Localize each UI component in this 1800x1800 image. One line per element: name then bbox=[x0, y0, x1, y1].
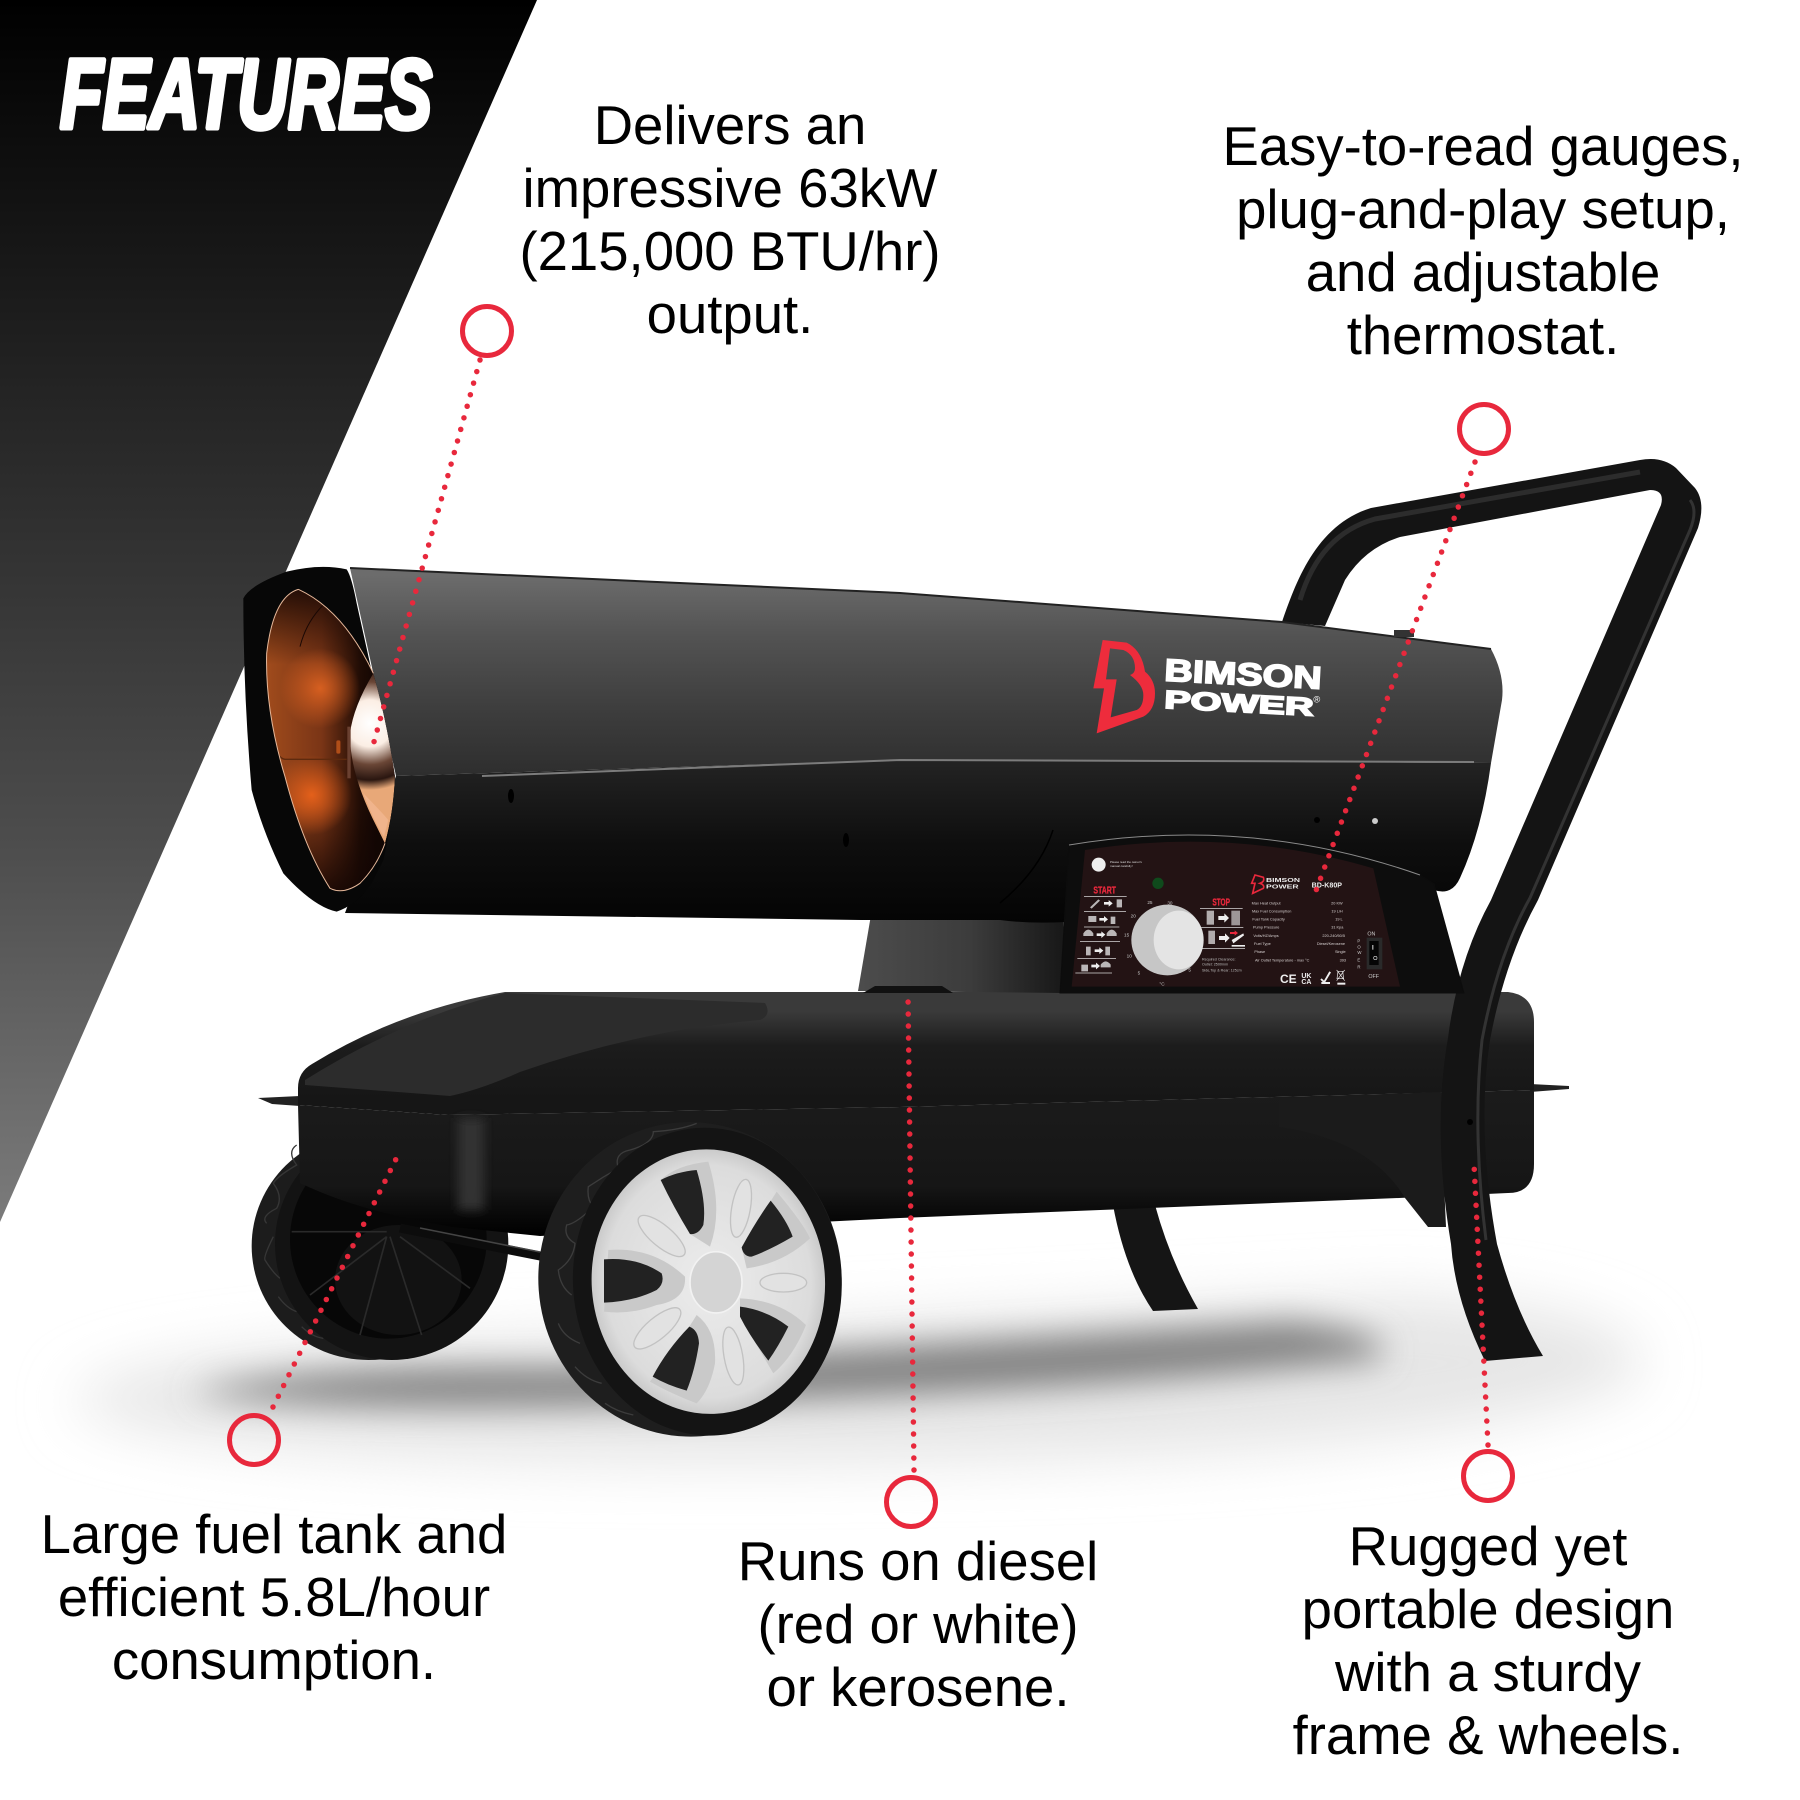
callout: output bbox=[372, 95, 941, 749]
wheel ovals bbox=[628, 1178, 807, 1387]
heater product bbox=[243, 459, 1701, 1447]
brand logo bbox=[1093, 640, 1323, 733]
registered mark: ® bbox=[1313, 695, 1320, 705]
power switch: OFF bbox=[1368, 974, 1380, 980]
wheel spoke bevels bbox=[604, 1162, 810, 1403]
clearance note: Required Clearance: bbox=[1202, 958, 1236, 962]
panel logo bbox=[1252, 875, 1300, 893]
specification table: Volts/HZ/Amps bbox=[1253, 934, 1279, 938]
thermostat knob bbox=[1131, 905, 1204, 975]
specification table: Pump Pressure bbox=[1253, 926, 1279, 930]
callout: fuel tank bbox=[41, 1155, 507, 1691]
manual note: Please read the owner's bbox=[1110, 860, 1142, 864]
handle and frame bbox=[1282, 459, 1701, 1361]
fuel type dotted leader bbox=[908, 995, 914, 1470]
control panel bezel bbox=[1060, 835, 1464, 993]
control panel highlight edge bbox=[1069, 835, 1420, 875]
power switch: W bbox=[1357, 950, 1362, 955]
fuel type text: (red or white) bbox=[757, 1594, 1079, 1655]
callout: frame bbox=[1293, 1164, 1683, 1766]
certification marks: UK bbox=[1301, 973, 1311, 980]
output text: (215,000 BTU/hr) bbox=[519, 221, 941, 282]
frame text: Rugged yet bbox=[1349, 1516, 1627, 1577]
specification table: Max Fuel Consumption bbox=[1252, 910, 1291, 914]
fuel type text: Runs on diesel bbox=[738, 1531, 1098, 1592]
specification table: Max Heat Output bbox=[1252, 901, 1282, 905]
thermostat scale: 5 bbox=[1188, 967, 1191, 972]
right flange bbox=[1530, 1084, 1569, 1092]
fuel tank bbox=[298, 992, 1534, 1236]
specification table: 20 KW bbox=[1331, 901, 1343, 905]
thermostat scale: 25 bbox=[1147, 900, 1153, 905]
thermostat scale: 20 bbox=[1131, 913, 1136, 918]
power light bbox=[1152, 878, 1164, 889]
specification table: 393 bbox=[1340, 958, 1346, 962]
heat outlet opening bbox=[263, 587, 397, 893]
fuel tank dotted leader bbox=[273, 1155, 398, 1407]
power switch: O bbox=[1357, 944, 1361, 949]
wheel spoke openings bbox=[604, 1170, 793, 1391]
specification table: Diesel/Kerosene bbox=[1317, 942, 1345, 946]
controls marker bbox=[1460, 404, 1508, 454]
wheel rim bbox=[583, 1142, 834, 1422]
control panel bbox=[1072, 842, 1400, 987]
fuel tank text: consumption. bbox=[112, 1630, 436, 1691]
frame marker bbox=[1464, 1452, 1512, 1500]
power switch: ON bbox=[1367, 931, 1375, 937]
BIMSON wordmark: BIMSON bbox=[1164, 653, 1323, 696]
thermostat scale: 5 bbox=[1138, 971, 1141, 976]
power switch bbox=[1357, 931, 1382, 980]
controls text: plug-and-play setup, bbox=[1236, 179, 1730, 240]
manual icon bbox=[1092, 858, 1106, 872]
thermostat scale: °C bbox=[1159, 981, 1165, 986]
rear leg bbox=[1113, 1205, 1198, 1311]
clearance note: Outlet: 2500mm bbox=[1202, 963, 1228, 967]
certification marks bbox=[1280, 970, 1345, 986]
power switch: P bbox=[1357, 939, 1360, 944]
fuel type text: or kerosene. bbox=[767, 1657, 1069, 1718]
frame text: with a sturdy bbox=[1334, 1642, 1642, 1703]
specification table: Single bbox=[1335, 950, 1346, 954]
stop steps bbox=[1200, 908, 1245, 949]
black gradient corner panel bbox=[0, 0, 537, 1222]
output text: Delivers an bbox=[594, 95, 866, 156]
clearance note: Side,Top & Rear: 125cm bbox=[1202, 968, 1242, 972]
certification marks: CE bbox=[1280, 972, 1297, 986]
front wheel bbox=[528, 1112, 852, 1447]
model number: BD-K80P bbox=[1312, 880, 1342, 889]
callout: controls bbox=[1222, 116, 1744, 896]
certification marks: CA bbox=[1301, 979, 1311, 986]
specification table: Fuel Type bbox=[1254, 942, 1271, 946]
thermostat scale: 30 bbox=[1167, 901, 1173, 906]
specification table: 31 Kpa bbox=[1331, 926, 1344, 930]
POWER wordmark: POWER bbox=[1164, 686, 1314, 722]
power switch: E bbox=[1357, 958, 1360, 963]
floor shadow bbox=[70, 1295, 1641, 1463]
start steps bbox=[1075, 896, 1127, 973]
controls dotted leader bbox=[1314, 462, 1475, 896]
thermostat scale bbox=[1124, 900, 1191, 986]
lightning B mark bbox=[1093, 640, 1155, 733]
manual note line two: manual carefully! bbox=[1110, 864, 1133, 868]
output text: output. bbox=[647, 284, 813, 345]
specification table: Fuel Tank Capacity bbox=[1252, 918, 1285, 922]
fuel type marker bbox=[886, 1478, 936, 1526]
tank bracket bbox=[1279, 1092, 1446, 1227]
pedestal mount bbox=[863, 986, 953, 993]
frame dotted leader bbox=[1474, 1164, 1488, 1445]
barrel front hood bbox=[243, 567, 397, 912]
thermostat scale: 15 bbox=[1124, 933, 1130, 938]
specification table: 220-240/50/5 bbox=[1322, 934, 1345, 938]
start heading: START bbox=[1093, 886, 1116, 897]
controls text: and adjustable bbox=[1306, 242, 1660, 303]
output text: impressive 63kW bbox=[523, 158, 938, 219]
barrel bbox=[345, 568, 1503, 923]
callout: fuel type bbox=[738, 995, 1098, 1718]
clearance note bbox=[1202, 958, 1242, 972]
specification table: 19 L bbox=[1335, 918, 1343, 922]
controls text: Easy-to-read gauges, bbox=[1222, 116, 1744, 177]
axle bbox=[400, 1228, 545, 1257]
controls text: thermostat. bbox=[1347, 305, 1619, 366]
specification table: 19 L/H bbox=[1331, 910, 1343, 914]
pedestal bbox=[858, 915, 1064, 993]
specification table: Phase bbox=[1254, 950, 1265, 954]
power switch: R bbox=[1357, 964, 1360, 969]
fuel tank text: efficient 5.8L/hour bbox=[58, 1567, 490, 1628]
frame text: frame & wheels. bbox=[1293, 1705, 1683, 1766]
output marker bbox=[462, 306, 512, 356]
wheel hub bbox=[690, 1252, 742, 1313]
fuel tank text: Large fuel tank and bbox=[41, 1504, 507, 1565]
frame text: portable design bbox=[1302, 1579, 1674, 1640]
thermostat scale: 10 bbox=[1127, 953, 1132, 958]
fuel tank marker bbox=[230, 1416, 278, 1464]
output dotted leader bbox=[372, 360, 480, 749]
panel logo: BIMSON bbox=[1266, 878, 1300, 884]
stop heading: STOP bbox=[1212, 897, 1230, 908]
panel logo: POWER bbox=[1266, 884, 1299, 890]
title: FEATURES bbox=[60, 39, 432, 149]
left flange bbox=[258, 1096, 300, 1106]
specification table bbox=[1252, 901, 1346, 962]
opening rim bbox=[267, 589, 385, 891]
rear wheel bbox=[252, 1128, 508, 1360]
specification table: Air Outlet Temperature - max °C bbox=[1255, 958, 1310, 962]
